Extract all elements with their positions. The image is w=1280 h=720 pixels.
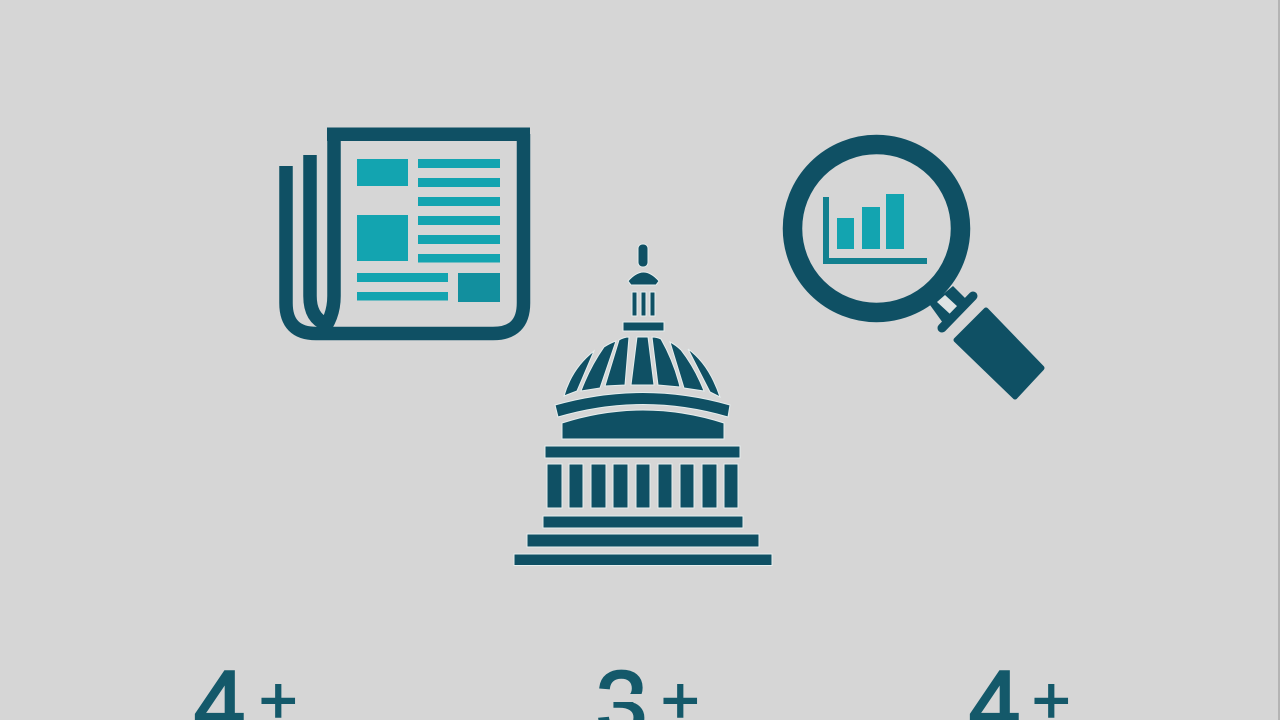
stat: left figure bbox=[194, 653, 298, 720]
capitol steps bbox=[514, 516, 772, 566]
stat: right figure bbox=[969, 653, 1071, 720]
capitol cornice and drum bbox=[545, 392, 740, 458]
capitol columns bbox=[547, 464, 738, 508]
capitol dome ribs bbox=[564, 337, 720, 397]
capitol lantern bbox=[623, 244, 664, 331]
icon: magnifying glass with bar chart bbox=[792, 144, 1042, 397]
stat: centre figure bbox=[594, 653, 700, 720]
icon: capitol building bbox=[514, 244, 772, 566]
bar chart in lens bbox=[823, 194, 927, 264]
icon: newspaper bbox=[286, 128, 530, 334]
magnifier handle bbox=[930, 286, 1042, 397]
